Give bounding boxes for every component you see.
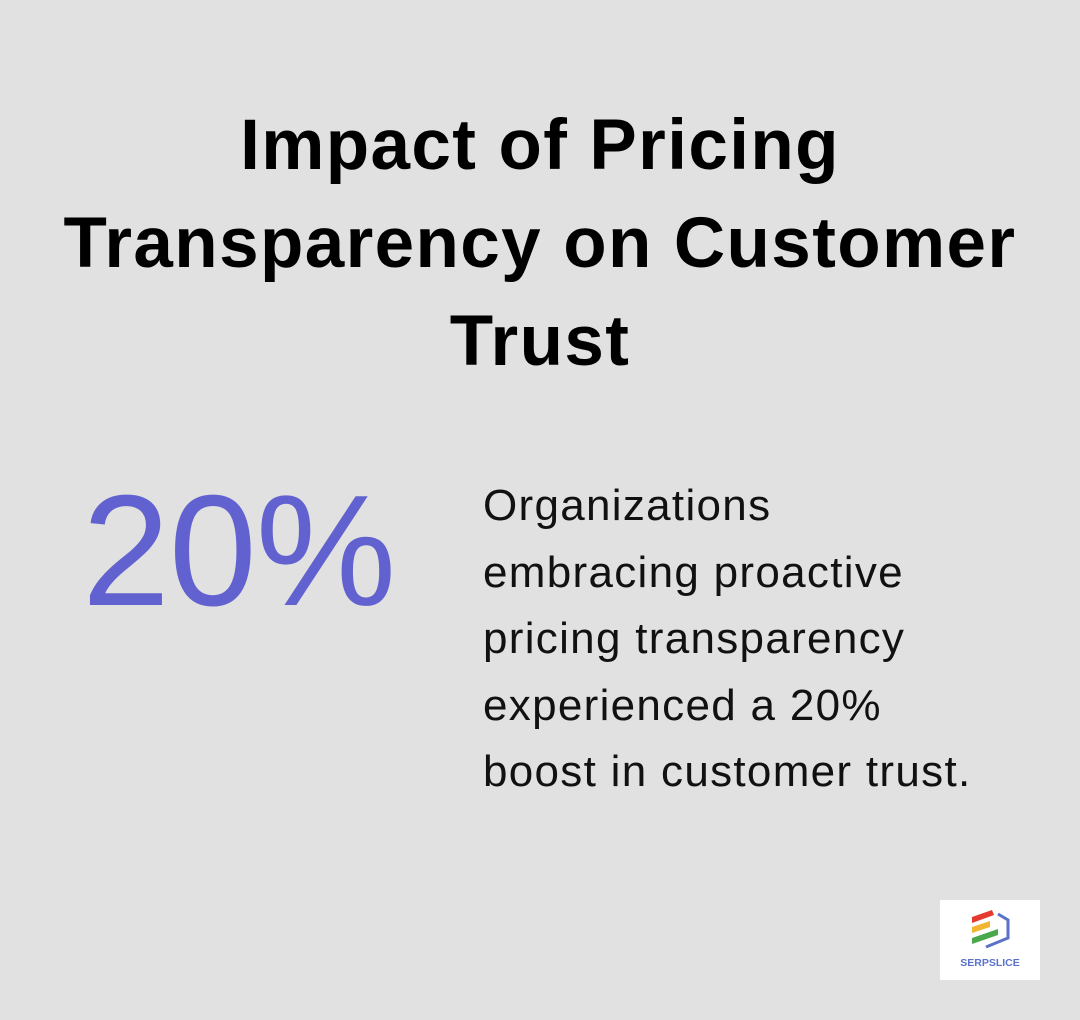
logo: serpslice: [940, 900, 1040, 980]
title: Impact of Pricing: [240, 106, 840, 185]
description text: [483, 481, 972, 796]
description text: boost in customer trust.: [483, 747, 972, 796]
description text: embracing proactive: [483, 548, 904, 596]
title: Transparency on Customer: [64, 204, 1016, 283]
logo: serpslice: SERPSLICE: [960, 957, 1020, 969]
title: [64, 106, 1016, 381]
big stat: 20%: [82, 463, 395, 639]
description text: pricing transparency: [483, 614, 905, 663]
description text: experienced a 20%: [483, 680, 882, 730]
title: Trust: [450, 302, 630, 381]
description text: Organizations: [483, 481, 771, 530]
